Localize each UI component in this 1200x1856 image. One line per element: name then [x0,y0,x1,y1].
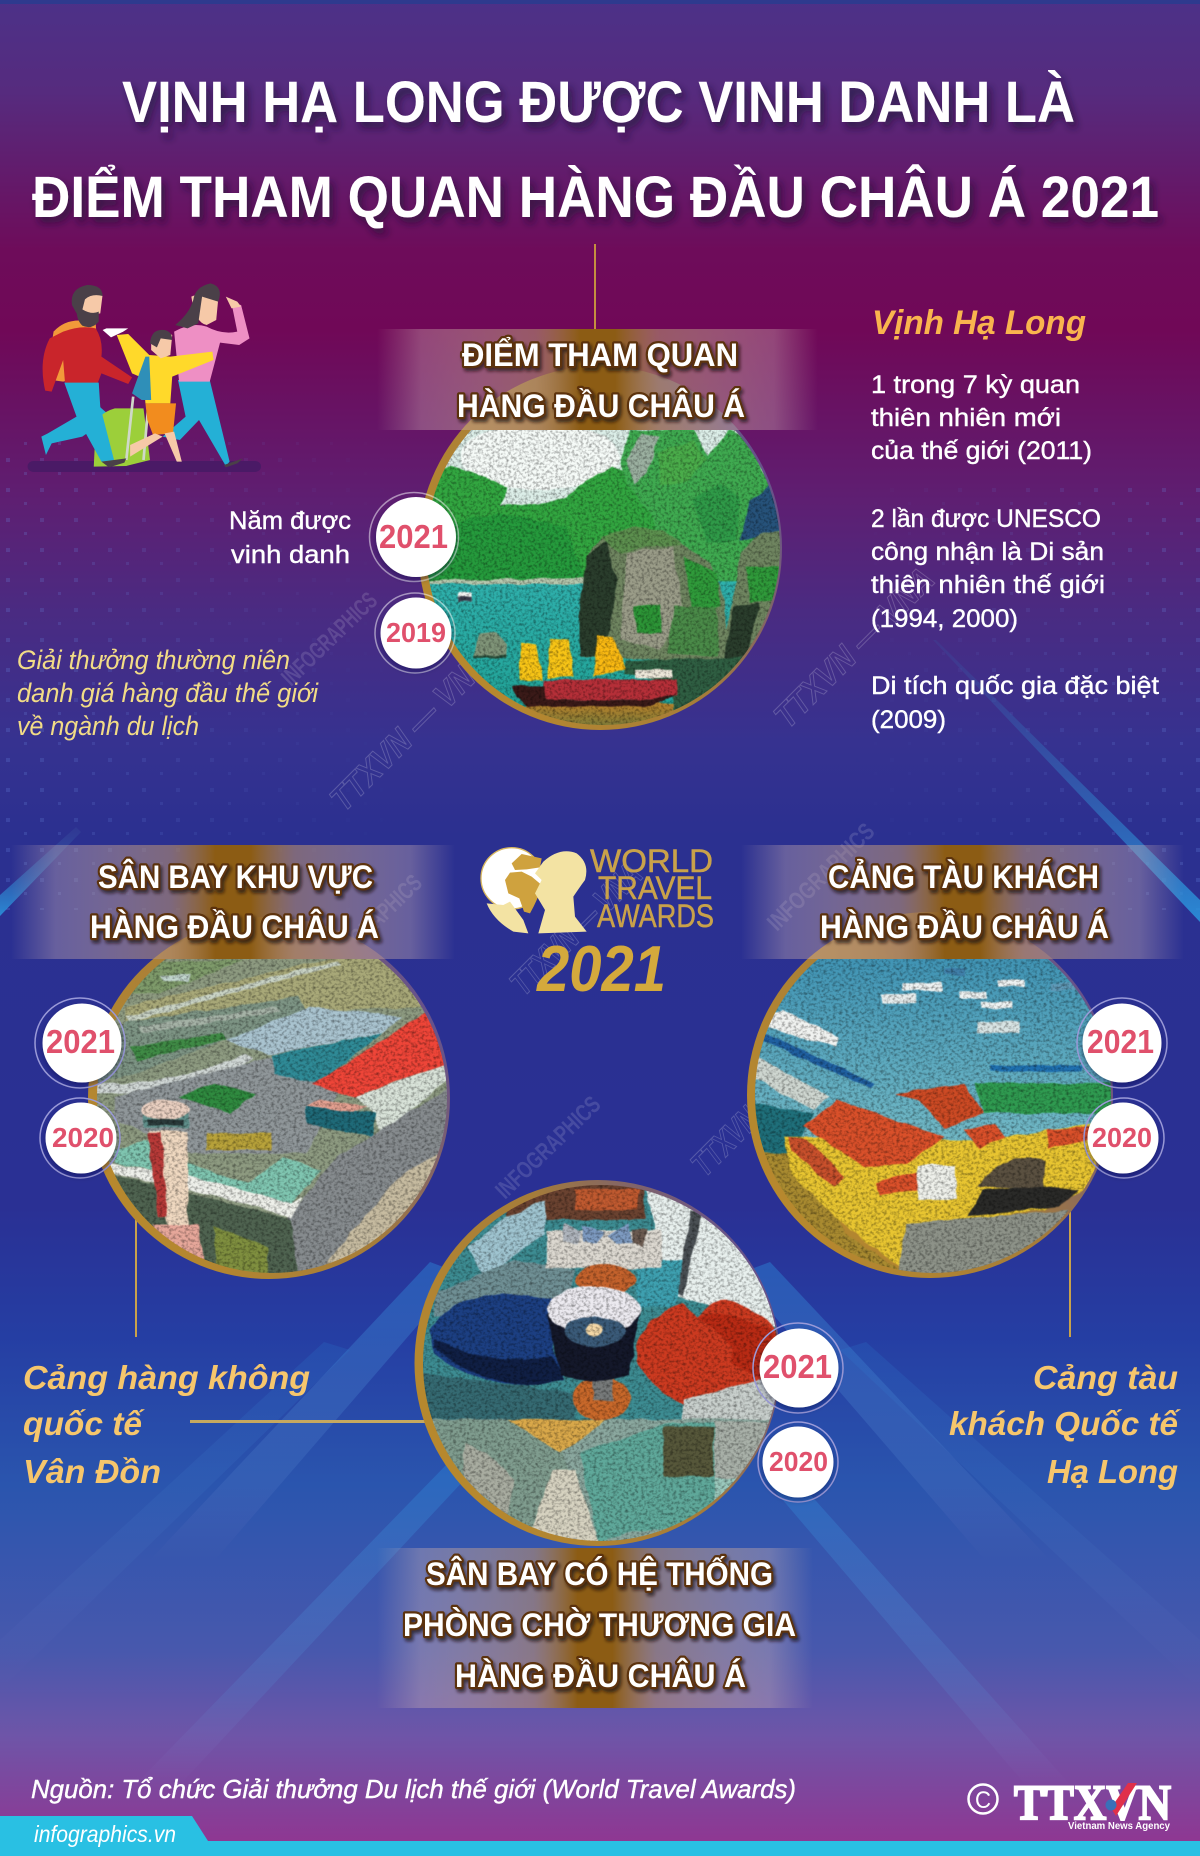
banner: top destination [377,329,818,430]
logo: World Travel Awards 2021: 2021 [535,932,666,1005]
logo: World Travel Awards 2021: AWARDS [597,898,714,934]
banner: regional airport [11,845,455,959]
title [32,70,1159,230]
text: Ha Long Bay facts: Vịnh Hạ Long [872,304,1086,342]
photo: Van Don airport [97,959,447,1273]
photo ring: port [747,912,1113,1278]
text: Ha Long Bay facts: (1994, 2000) [871,605,1018,633]
watermarks: INFOGRAPHICS [276,587,383,691]
logo: World Travel Awards 2021 [481,843,714,1005]
text: Ha Long Bay facts: 2 lần được UNESCO [871,505,1101,533]
logo: TTXVN [968,1774,1171,1832]
label: Van Don: Vân Đồn [23,1453,161,1490]
badge: 2021: 2021 [1087,1023,1154,1060]
badge: 2020 [758,1422,838,1502]
watermarks: INFOGRAPHICS [490,1091,606,1204]
badge: 2019: 2019 [386,617,446,648]
badge: 2021 [753,1323,843,1413]
photo: business lounge [423,1185,777,1541]
panel: business lounge [377,1177,843,1708]
logo: World Travel Awards 2021: WORLD [590,843,713,879]
photo: Ha Long Bay [428,430,780,725]
panel: Ha Long Bay [370,329,818,748]
text: award description: danh giá hàng đầu thế giới [17,678,319,708]
banner: regional airport: HÀNG ĐẦU CHÂU Á [90,909,379,945]
logo: TTXVN: TTXVN [1014,1774,1171,1830]
badge: 2020 [1084,1098,1164,1178]
text: Ha Long Bay facts: (2009) [871,706,946,734]
photo: Ha Long cruise port [755,959,1111,1273]
watermarks: INFOGRAPHICS [315,870,428,979]
badge: 2020: 2020 [1092,1122,1152,1153]
footer band: infographics.vn [0,1816,1200,1856]
text: Ha Long Bay facts: của thế giới (2011) [871,437,1092,465]
text: award description [17,645,319,741]
watermarks: TTXVN — VNA [684,1037,831,1184]
banner: cruise port: CẢNG TÀU KHÁCH [828,859,1099,895]
label: Van Don: Cảng hàng không [23,1359,310,1396]
banner: top destination: HÀNG ĐẦU CHÂU Á [457,388,745,424]
text: Ha Long Bay facts: công nhận là Di sản [871,538,1104,566]
watermarks: TTXVN — VNA [767,560,942,736]
badge: 2021: 2021 [763,1348,832,1385]
text: Ha Long Bay facts: 1 trong 7 kỳ quan [871,371,1080,399]
label: Ha Long port [949,1359,1182,1490]
watermarks: TTXVN — VNA [323,643,498,819]
logo: World Travel Awards 2021: TRAVEL [598,870,712,906]
panel: cruise port [741,845,1184,1490]
connector line: lounge [190,1420,425,1423]
banner: business lounge: SÂN BAY CÓ HỆ THỐNG [426,1556,773,1592]
badge: 2021 [35,998,125,1088]
text: year honoured: vinh danh [231,541,350,569]
badge: 2019 [375,593,455,673]
banner: business lounge [377,1548,813,1708]
photo ring: airport [88,917,450,1279]
logo: TTXVN: Vietnam News Agency [1068,1821,1170,1832]
watermarks [276,560,942,1204]
logo: TTXVN: C [975,1787,991,1814]
watermarks: INFOGRAPHICS [762,818,880,936]
connector line: port [1069,1203,1071,1337]
icon: travelling family [28,283,261,472]
text: Ha Long Bay facts [871,304,1159,734]
banner: cruise port: HÀNG ĐẦU CHÂU Á [820,909,1109,945]
banner: regional airport: SÂN BAY KHU VỰC [98,859,373,895]
badge: 2021 [1077,998,1167,1088]
text: Ha Long Bay facts: thiên nhiên mới [871,404,1061,432]
badge: 2020 [40,1098,120,1178]
banner: cruise port [741,845,1184,959]
text: year honoured [229,507,351,569]
text: award description: Giải thưởng thường niên [17,645,290,675]
badge: 2020: 2020 [769,1446,828,1477]
banner: business lounge: HÀNG ĐẦU CHÂU Á [455,1658,746,1694]
text: Ha Long Bay facts: Di tích quốc gia đặc biệt [871,672,1159,700]
label: Ha Long port: Cảng tàu [1033,1359,1178,1396]
footer band: infographics.vn: infographics.vn [34,1821,176,1847]
badge: 2020: 2020 [52,1122,114,1153]
text: Ha Long Bay facts: thiên nhiên thế giới [871,571,1105,599]
badge: 2021: 2021 [379,518,448,555]
label: Ha Long port: Hạ Long [1047,1453,1178,1490]
source: Nguồn: Tổ chức Giải thưởng Du lịch thế giới (World Travel Awards) [31,1774,796,1804]
photo ring: Ha Long [418,366,782,730]
connector line top [594,244,596,334]
banner: business lounge: PHÒNG CHỜ THƯƠNG GIA [403,1607,796,1643]
badge: 2021 [370,492,458,582]
banner: top destination: ĐIỂM THAM QUAN [462,337,738,373]
text: year honoured: Năm được [229,507,351,535]
photo ring: lounge [414,1180,780,1546]
text: award description: về ngành du lịch [17,711,199,741]
watermarks: TTXVN — VNA [503,856,650,1003]
connector line: airport [135,1167,137,1337]
label: Van Don [23,1359,310,1490]
badge: 2021: 2021 [46,1023,115,1060]
label: Ha Long port: khách Quốc tế [949,1405,1182,1442]
title: VỊNH HẠ LONG ĐƯỢC VINH DANH LÀ [122,70,1075,135]
label: Van Don: quốc tế [23,1405,146,1442]
panel: airport [11,845,459,1490]
